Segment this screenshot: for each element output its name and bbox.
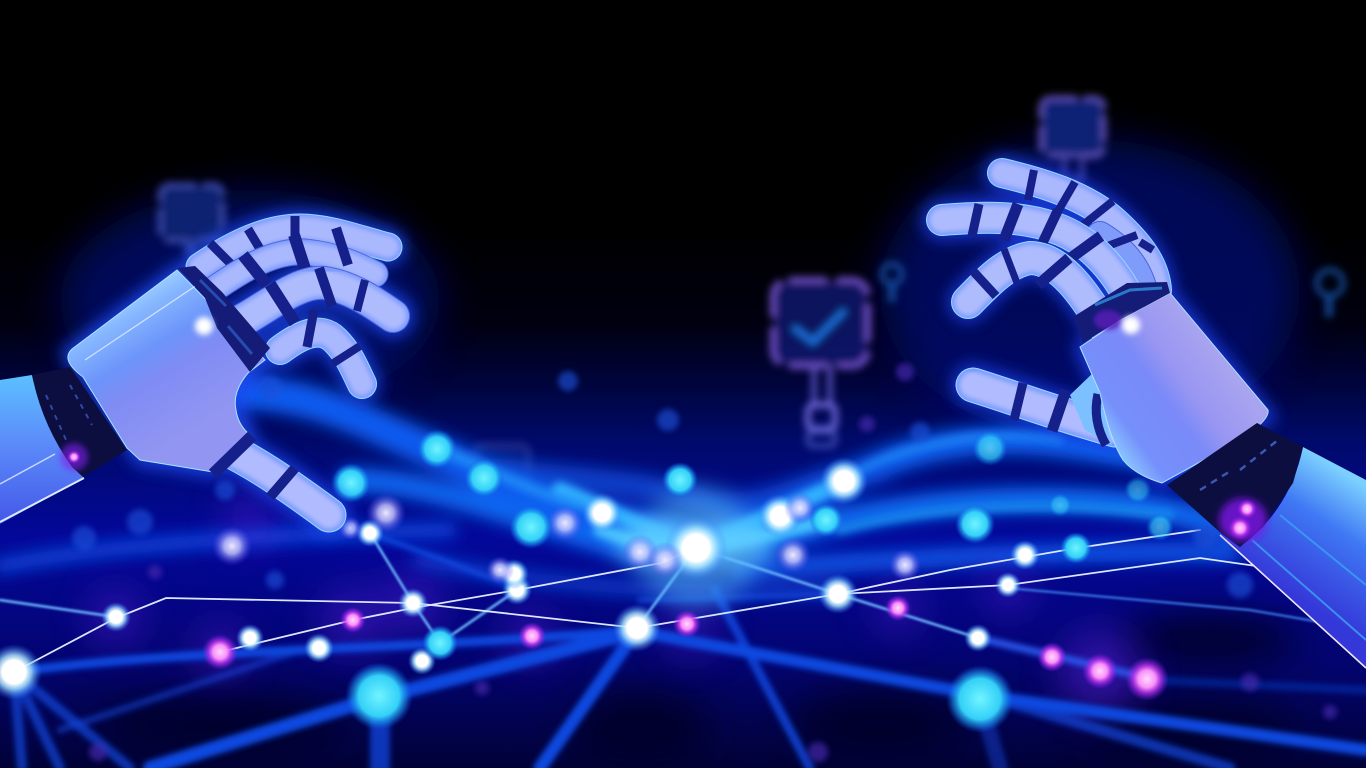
badge: top right — [1041, 98, 1104, 180]
right glint — [1122, 316, 1140, 334]
flowing waves — [0, 392, 1240, 591]
network thin lines — [0, 530, 1366, 672]
thumb — [225, 448, 329, 515]
cyan nodes — [331, 429, 1174, 733]
white nodes — [0, 457, 1040, 700]
badge: checkmark — [773, 280, 868, 446]
left forearm — [0, 375, 84, 524]
right robotic hand — [942, 170, 1366, 668]
pinky — [280, 310, 362, 384]
network thick beams — [14, 533, 1366, 768]
purple haze — [90, 496, 1140, 712]
faint distant nodes — [72, 371, 1253, 598]
purple nodes — [202, 595, 1169, 701]
left robotic hand — [0, 216, 393, 524]
index finger — [243, 268, 393, 323]
dark floor patches — [90, 615, 1300, 768]
right thumb — [973, 372, 1115, 445]
glowing nodes — [0, 363, 1337, 762]
badge: faint centre — [474, 445, 529, 493]
top finger — [1002, 170, 1157, 290]
hidden finger — [1100, 235, 1153, 295]
curled finger — [968, 249, 1103, 325]
middle back finger — [200, 216, 388, 267]
glow: left hand — [67, 228, 393, 515]
left palm — [68, 270, 265, 472]
thumb stripes — [213, 436, 252, 474]
long finger — [942, 204, 1130, 300]
right wrist band — [1167, 423, 1303, 547]
left wrist band — [32, 367, 127, 477]
right forearm — [1220, 447, 1366, 668]
halo around hands — [60, 140, 1300, 440]
ring finger — [217, 228, 375, 287]
right fingers — [942, 170, 1157, 445]
glow: right hand — [942, 173, 1270, 483]
left glint — [195, 317, 213, 335]
right knuckle band — [1073, 282, 1170, 343]
right palm — [1080, 293, 1268, 483]
pale nodes — [212, 492, 921, 584]
left fingers — [200, 216, 393, 515]
badge: top left — [160, 185, 223, 259]
left knuckle band — [178, 266, 270, 372]
central hub — [636, 488, 756, 608]
small key badges — [882, 264, 1343, 317]
